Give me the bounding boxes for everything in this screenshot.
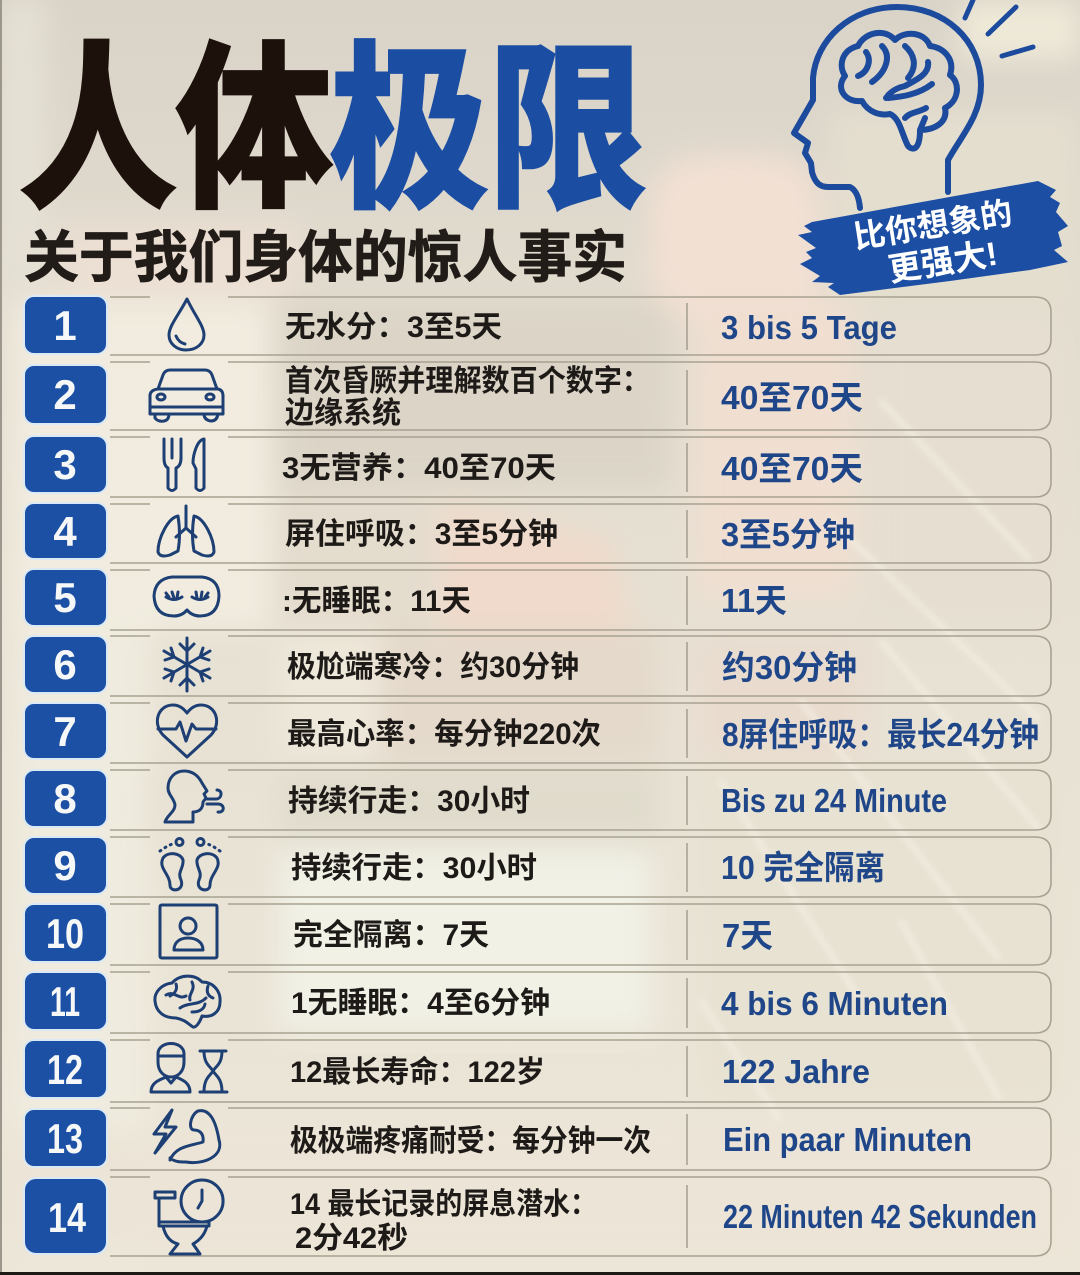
row 10 — [24, 904, 1051, 965]
value 9: 10 完全隔离 — [721, 849, 885, 886]
row 13 — [24, 1108, 1051, 1170]
row 6 — [24, 636, 1051, 696]
value 1: 3 bis 5 Tage — [721, 309, 897, 346]
badge 1 — [24, 296, 107, 354]
icon: lungs — [158, 506, 214, 556]
row 4 — [24, 503, 1051, 563]
row 5 — [24, 569, 1051, 630]
text 2: 边缘系统 — [285, 397, 401, 430]
icon: sleep mask — [154, 577, 219, 616]
badge 14: 14 — [48, 1194, 87, 1241]
text 3: 3无营养：40至70天 — [282, 452, 556, 485]
value 6: 约30分钟 — [722, 649, 857, 686]
value 2: 40至70天 — [721, 379, 863, 416]
badge 8 — [24, 770, 107, 827]
banner text: 比你想象的 — [851, 195, 1015, 255]
badge 10 — [24, 904, 107, 962]
row 2 — [24, 362, 1051, 430]
text 11: 1无睡眠：4至6分钟 — [291, 987, 550, 1020]
row 14 — [24, 1177, 1051, 1256]
badge 12: 12 — [47, 1046, 83, 1093]
icon: water drop — [169, 299, 204, 350]
badge 9 — [24, 837, 107, 894]
badge 10: 10 — [46, 910, 84, 957]
text 14 — [290, 1188, 597, 1255]
banner text — [851, 195, 1021, 293]
text 10: 完全隔离：7天 — [293, 919, 489, 952]
row 1 — [24, 296, 1051, 355]
icon: toilet and clock — [155, 1180, 223, 1254]
badge 14 — [24, 1178, 107, 1254]
icon: heart with pulse — [157, 705, 217, 757]
badge 8: 8 — [53, 775, 77, 822]
head outline — [794, 7, 981, 208]
text 1: 无水分：3至5天 — [285, 311, 502, 344]
text 2 — [285, 365, 650, 430]
row 9 — [24, 837, 1051, 897]
badge 13: 13 — [47, 1115, 83, 1162]
badge 11: 11 — [50, 978, 80, 1025]
icon: toes — [160, 844, 220, 851]
value 8: Bis zu 24 Minute — [721, 782, 947, 819]
icon: car — [150, 370, 223, 421]
value 12: 122 Jahre — [722, 1053, 870, 1090]
badge 13 — [24, 1109, 107, 1167]
badge 3: 3 — [53, 441, 77, 488]
text 13: 极极端疼痛耐受：每分钟一次 — [290, 1125, 651, 1158]
icon: brain — [155, 976, 220, 1027]
value 5: 11天 — [721, 582, 787, 619]
badge 9: 9 — [53, 842, 77, 889]
title — [20, 31, 646, 230]
badge 3 — [24, 436, 107, 493]
badge 7: 7 — [53, 708, 77, 755]
text 14: 14 最长记录的屏息潜水： — [290, 1188, 597, 1221]
text 9: 持续行走：30小时 — [291, 852, 537, 885]
value 4: 3至5分钟 — [721, 516, 855, 553]
brush banner — [798, 181, 1068, 295]
badge 6 — [24, 636, 107, 693]
subtitle: 关于我们身体的惊人事实 — [24, 226, 627, 289]
title blue part: 极限 — [330, 31, 646, 230]
badge 2 — [24, 365, 107, 424]
badge 1: 1 — [53, 302, 77, 349]
icon: elder and hourglass — [151, 1044, 227, 1092]
row 7 — [24, 703, 1051, 763]
text 4: 屏住呼吸：3至5分钟 — [285, 518, 558, 551]
text 8: 持续行走：30小时 — [288, 785, 530, 818]
brain — [841, 33, 957, 149]
row 3 — [24, 436, 1051, 497]
value 11: 4 bis 6 Minuten — [721, 985, 948, 1022]
icon: snowflake — [164, 638, 210, 691]
value 13: Ein paar Minuten — [723, 1121, 972, 1158]
text 7: 最高心率：每分钟220次 — [287, 718, 601, 751]
icon: footprints — [162, 854, 218, 890]
value 3: 40至70天 — [721, 450, 863, 487]
text 14: 2分42秒 — [295, 1222, 408, 1255]
icon: person portrait frame — [160, 905, 217, 958]
badge 4 — [24, 503, 107, 559]
banner text: 更强大! — [886, 235, 1000, 288]
row 11 — [24, 972, 1051, 1033]
badge 11 — [24, 972, 107, 1030]
big toes — [176, 839, 204, 846]
badge 2: 2 — [53, 371, 77, 418]
text 6: 极尬端寒冷：约30分钟 — [287, 651, 579, 684]
icon: head with brain and banner — [794, 0, 1068, 295]
badge 7 — [24, 703, 107, 759]
row 8 — [24, 770, 1051, 830]
badge 4: 4 — [53, 508, 77, 555]
text 12: 12最长寿命：122岁 — [290, 1055, 545, 1089]
title black part: 人体 — [20, 31, 332, 230]
badge 5 — [24, 569, 107, 626]
text 5: :无睡眠：11天 — [282, 585, 471, 618]
badge 12 — [24, 1040, 107, 1098]
badge 6: 6 — [53, 641, 77, 688]
badge 5: 5 — [53, 574, 77, 621]
value 10: 7天 — [722, 917, 773, 954]
icon: head breathing out — [165, 771, 223, 822]
icon: fork and knife — [164, 439, 204, 490]
rays — [965, 0, 1033, 56]
value 7: 8屏住呼吸：最长24分钟 — [722, 716, 1039, 753]
text 2: 首次昏厥并理解数百个数字： — [285, 365, 650, 398]
icon: muscle and lightning — [154, 1110, 220, 1163]
row 12 — [24, 1040, 1051, 1102]
